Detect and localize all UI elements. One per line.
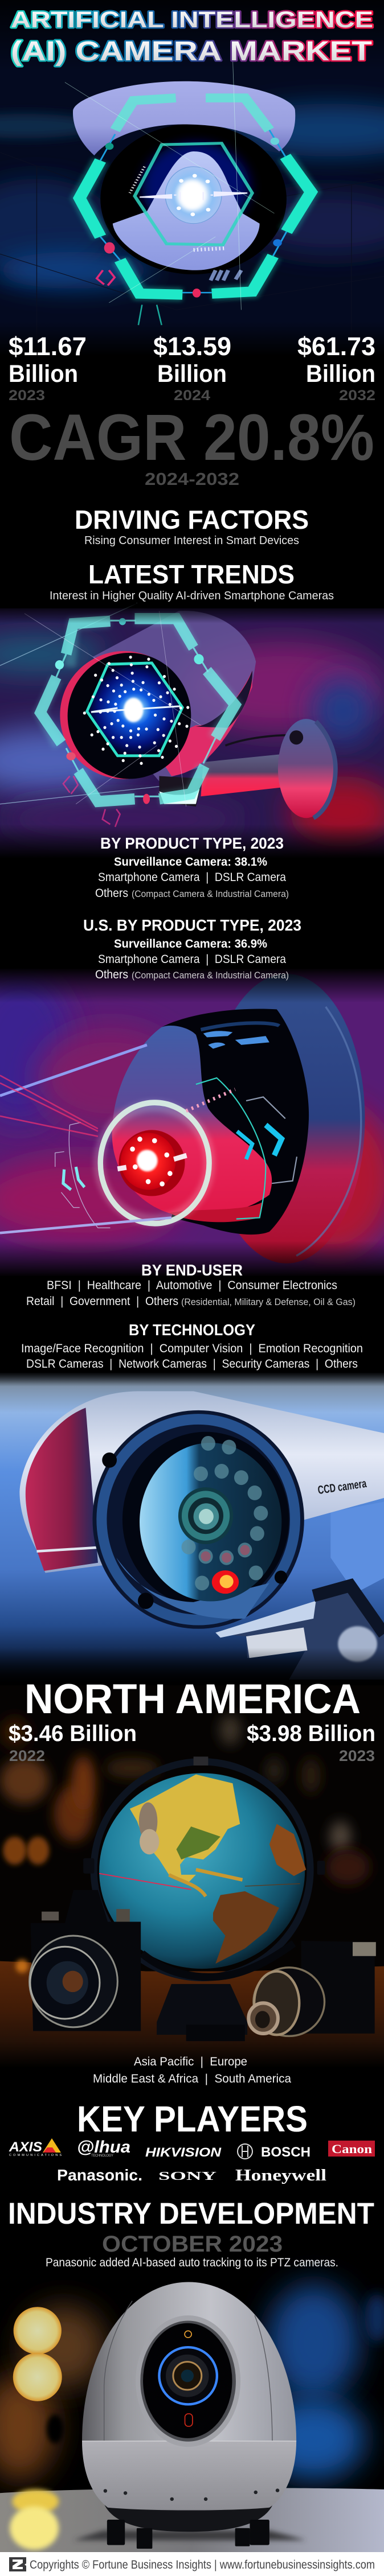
icon: camera bracket: [215, 1502, 384, 1680]
logo: Dahua: TECHNOLOGY: [91, 2154, 113, 2158]
north america 2023 value: 2023: [339, 1747, 375, 1764]
latest trends: LATEST TRENDS: [88, 559, 295, 589]
icon: bokeh background lights: [0, 1715, 370, 1885]
icon: wooden table: [0, 1961, 384, 2068]
icon: table surface: [0, 2488, 384, 2552]
icon: small brackets and bars: [97, 270, 241, 325]
development description: Panasonic added AI-based auto tracking to its PTZ cameras.: [46, 2256, 338, 2269]
icon: blurred background lights: [0, 2284, 384, 2480]
market value 2024: [153, 332, 231, 404]
label: CCD camera on housing: CCD camera: [317, 1478, 367, 1497]
by end-user: (Residential, Military & Defense, Oil & Gas): [181, 1297, 356, 1307]
U.S. by product type 2023: U.S. BY PRODUCT TYPE, 2023: [83, 916, 301, 934]
other regions: Middle East & Africa | South America: [93, 2072, 291, 2085]
market value 2023: 2023: [9, 388, 45, 404]
logo: Axis Communications: [9, 2138, 62, 2157]
market value 2023: Billion: [9, 360, 78, 388]
by product type 2023: Others: [95, 887, 128, 900]
panel: bullet camera with hexagon overlay: [0, 603, 384, 867]
icon: globe: [94, 1756, 311, 1978]
icon: right camera: [248, 1941, 376, 2036]
panel: CCD security camera: [0, 1357, 384, 1685]
icon: outer translucent hexagon: [40, 618, 235, 804]
by end-user: Retail | Government | Others: [26, 1295, 178, 1308]
logo: Canon: Canon: [332, 2142, 372, 2156]
logo: Fortune Business Insights: [9, 2557, 26, 2571]
market value 2032: 2032: [339, 388, 375, 404]
logo: Hikvision: HIKVISION: [145, 2145, 222, 2159]
icon: lens glass and LEDs: [140, 1443, 281, 1602]
logo: Axis Communications: COMMUNICATIONS: [9, 2154, 62, 2157]
north america 2022 value: [9, 1721, 137, 1764]
U.S. by product type 2023: Surveillance Camera: 36.9%: [114, 937, 267, 950]
market value 2023: $11.67: [9, 332, 87, 361]
development date: OCTOBER 2023: [102, 2232, 283, 2257]
by technology: [21, 1321, 363, 1371]
by end-user: BY END-USER: [141, 1261, 243, 1279]
U.S. by product type 2023: (Compact Camera & Industrial Camera): [132, 970, 289, 981]
icon: wall mount disc: [208, 974, 365, 1264]
panel: globe and cameras: [0, 1685, 384, 2068]
north america 2022 value: $3.46 Billion: [9, 1721, 137, 1746]
icon: transparent dome: [112, 1026, 272, 1216]
by product type 2023: [95, 834, 289, 900]
market value 2032: $61.73: [297, 332, 375, 361]
icon: camera mount and arm: [201, 719, 336, 818]
icon: feet and base: [104, 2504, 273, 2549]
panel: hero ceiling dome camera: [0, 0, 384, 356]
driving factors: [75, 505, 309, 547]
market value 2023: [9, 332, 87, 404]
panel: red lens camera: [0, 966, 384, 1276]
by product type 2023: Smartphone Camera | DSLR Camera: [98, 871, 286, 884]
icon: light beams: [0, 1045, 147, 1096]
U.S. by product type 2023: [83, 916, 301, 981]
icon: bokeh lights: [10, 2307, 62, 2550]
icon: lens hexagon and light dots: [84, 657, 188, 763]
by product type 2023: BY PRODUCT TYPE, 2023: [100, 834, 284, 852]
logo: Dahua: @lhua: [77, 2138, 130, 2157]
logo: Panasonic: Panasonic.: [57, 2166, 142, 2184]
by end-user: [26, 1261, 356, 1308]
icon: dome camera body: [73, 81, 295, 274]
by product type 2023: Surveillance Camera: 38.1%: [114, 855, 267, 869]
by technology: DSLR Cameras | Network Cameras | Security Cameras | Others: [26, 1357, 358, 1371]
icon: red iris and ring: [99, 1102, 210, 1224]
by product type 2023: (Compact Camera & Industrial Camera): [132, 888, 289, 899]
icon: inner hexagon: [134, 143, 252, 245]
logo: Axis Communications: AXIS: [9, 2139, 42, 2155]
U.S. by product type 2023: Others: [95, 968, 128, 981]
logo: Honeywell: Honeywell: [235, 2166, 326, 2184]
icon: small brackets: [63, 776, 120, 827]
other regions: [93, 2055, 291, 2085]
logo: Bosch: BOSCH: [261, 2145, 311, 2160]
market value 2024: 2024: [174, 388, 210, 404]
north america 2022 value: 2022: [9, 1747, 45, 1764]
icon: chevrons: [55, 1078, 297, 1228]
latest trends: Interest in Higher Quality AI-driven Smartphone Cameras: [50, 590, 334, 602]
title: (AI) CAMERA MARKET: [11, 36, 372, 67]
logo: Canon: [328, 2141, 375, 2157]
title: ARTIFICIAL INTELLIGENCE: [11, 7, 373, 32]
driving factors: DRIVING FACTORS: [75, 505, 309, 534]
icon: outer neon hexagon: [80, 98, 311, 298]
footer bar: [0, 2552, 384, 2576]
CAGR figure: 2024-2032: [145, 469, 239, 489]
icon: black camera hood: [162, 1009, 309, 1234]
market value 2024: Billion: [157, 360, 227, 388]
market value 2024: $13.59: [153, 332, 231, 361]
icon: camera housing: [19, 1391, 384, 1629]
market value 2032: [297, 332, 375, 404]
by technology: Image/Face Recognition | Computer Vision | Emotion Recognition: [21, 1342, 363, 1355]
logo: Sony: SONY: [158, 2169, 216, 2183]
title: [11, 7, 373, 67]
icon: camera egg body: [82, 2282, 296, 2511]
icon: camera housing: [60, 611, 256, 806]
icon: left camera: [30, 1890, 141, 2031]
U.S. by product type 2023: Smartphone Camera | DSLR Camera: [98, 953, 286, 966]
by technology: BY TECHNOLOGY: [129, 1321, 255, 1339]
panel: PTZ camera photo: [0, 2282, 384, 2552]
north america heading: NORTH AMERICA: [24, 1676, 361, 1722]
market value 2032: Billion: [306, 360, 375, 388]
logo: Bosch: [238, 2144, 311, 2160]
icon: camera face with lens: [136, 2315, 240, 2447]
other regions: Asia Pacific | Europe: [134, 2055, 247, 2068]
by end-user: BFSI | Healthcare | Automotive | Consumer Electronics: [47, 1279, 337, 1292]
icon: globe stand: [83, 1858, 325, 2041]
north america 2023 value: $3.98 Billion: [247, 1721, 375, 1746]
latest trends: [50, 559, 334, 602]
driving factors: Rising Consumer Interest in Smart Devices: [84, 534, 299, 547]
north america 2023 value: [247, 1721, 375, 1764]
key players heading: KEY PLAYERS: [77, 2098, 308, 2139]
